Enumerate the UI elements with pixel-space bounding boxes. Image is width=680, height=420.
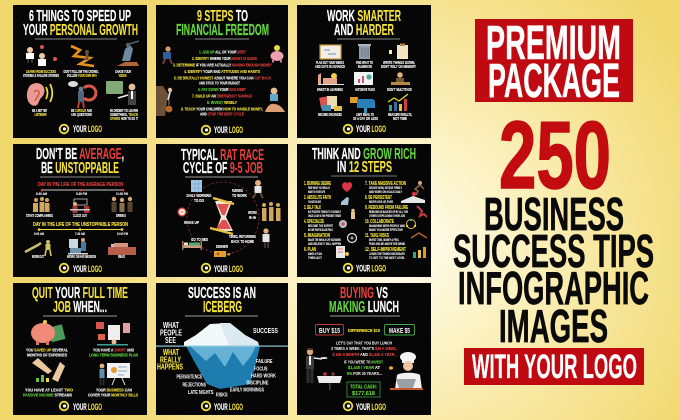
icon: workers crowd	[262, 202, 280, 221]
icon: desk with books	[108, 243, 136, 255]
timeline: unstoppable person: DAY IN THE LIFE OF THE UNSTOPPABLE PERSON	[33, 222, 128, 228]
caption: plan out your weeks	[315, 60, 345, 69]
text: explanation	[331, 340, 397, 376]
caption row: average day: STAYS COMPLAINING	[26, 213, 53, 218]
list: nine steps: 9. TEACH YOUR CHILDREN HOW TO HANDLE MONEY,	[181, 106, 263, 112]
heading: work smarter	[327, 8, 401, 40]
logo: YOUR LOGO	[214, 264, 243, 275]
caption: passive income: YOU HAVE AT LEAST TWO	[25, 388, 74, 392]
list: steps 7 to 12: TO GET TO THE NEXT LEVEL	[369, 256, 405, 260]
logo: YOUR LOGO	[356, 124, 386, 135]
heading: rat race: TYPICAL RAT RACE	[181, 147, 264, 164]
icon: automate tasks chart	[354, 72, 373, 85]
labels: cycle steps: RUNNING	[232, 188, 243, 193]
heading: 6 things: 6 THINGS TO SPEED UP	[29, 8, 131, 25]
caption: measure results	[388, 112, 412, 121]
caption: write things down	[381, 60, 416, 69]
caption row: unstoppable day: WORK ON HIS MISSION	[67, 254, 96, 259]
caption: learn from success	[23, 69, 59, 78]
icon: piggy bank with cash	[31, 320, 65, 345]
list: steps 7 to 12: INVEST TIME, MONEY & FEEL	[369, 238, 399, 242]
label: success: SUCCESS	[253, 326, 278, 335]
heading: iceberg: ICEBERG	[203, 299, 242, 316]
list: steps 1 to 6: 2. ABSOLUTE FAITH	[304, 195, 331, 201]
text: what really happens: WHAT	[163, 348, 179, 357]
list: steps 7 to 12: MAKE YOU MORE EFFECTIVE	[369, 228, 403, 232]
labels: under the surface: DISCIPLINE	[246, 380, 269, 386]
caption: better listener	[32, 108, 47, 117]
panel: buying vs making lunch	[297, 283, 431, 415]
caption: teach others: IN ORDER TO LEARN	[110, 108, 138, 113]
panel: 9 steps to financial freedom	[156, 5, 288, 138]
list: steps 7 to 12: MANAGING WITH PEOPLE AND	[369, 224, 406, 228]
caption: don't multitask: DON'T MULTITASK	[387, 87, 412, 92]
list: steps 1 to 6: BECOME THE EXPERT	[308, 224, 333, 228]
list: steps 1 to 6: AND BELIEVE IT WILL HAPPEN	[308, 242, 341, 246]
timeline: average person: 11:30 PM	[116, 192, 128, 196]
caption: monthly bills: COVER YOUR MONTHLY BILLS	[88, 392, 138, 398]
panel: don't be average	[13, 144, 147, 277]
list: steps 1 to 6: 6. PLAN	[304, 247, 316, 253]
icon: waiter and table	[306, 348, 342, 390]
logo: YOUR LOGO	[356, 264, 386, 274]
list: nine steps: 4. IDENTIFY YOUR BAD ATTITUDES AND HABITS	[184, 69, 260, 74]
caption: better listener: LISTENER	[34, 112, 46, 117]
list: steps 7 to 12: REBOUND IS BACKED UP BY ALL THE	[369, 210, 408, 214]
icon: office building	[191, 180, 202, 192]
caption: follow your own way: FOLLOW YOUR OWN WAY	[67, 73, 97, 78]
heading: think and grow rich	[312, 146, 416, 176]
icons: right column	[401, 181, 427, 258]
icon: tired man	[262, 228, 270, 248]
heading: rat race	[181, 147, 264, 178]
text: what people see: SEE	[165, 336, 176, 345]
list: steps 1 to 6: 1. BURNING DESIRE	[304, 181, 331, 187]
panel: rat race cycle	[156, 144, 288, 277]
caption: curious	[71, 108, 92, 117]
caption: find what to eliminate: FIND WHAT TO	[356, 60, 373, 65]
list: steps 1 to 6: SAY POSITIVE THINGS TO YOURSELF	[308, 210, 341, 214]
logo: YOUR LOGO	[214, 125, 243, 136]
comparison: buy vs make	[316, 324, 414, 335]
heading: think and grow rich: IN 12 STEPS	[337, 159, 392, 176]
list: steps 1 to 6: IN ONE PARTICULAR FIELD	[308, 228, 333, 232]
caption: chase your vision	[115, 69, 131, 78]
logo: YOUR LOGO	[356, 402, 386, 413]
text: explanation: $ 156 A MONTH AND $1,440 A YEAR.	[332, 352, 396, 357]
labels: under the surface: PERSISTENCE	[176, 374, 203, 380]
heading: buying vs making	[329, 285, 400, 316]
text: what really happens	[157, 348, 183, 372]
timeline: average person: DAY IN THE LIFE OF THE AVERAGE PERSON	[38, 182, 123, 188]
list: steps 1 to 6: THEN ACT	[308, 256, 322, 260]
list: steps 7 to 12	[365, 181, 408, 260]
icons: left column	[336, 182, 356, 258]
caption: business plan: YOU HAVE A SHORT AND	[93, 348, 134, 352]
icon: mailbox and envelope	[350, 97, 375, 113]
labels: under the surface: FAILURE	[256, 359, 273, 365]
heading: 9 steps	[176, 8, 269, 40]
caption: become organized: BECOME ORGANIZED	[318, 112, 342, 117]
caption: saved up: YOU SAVED UP SEVERAL	[26, 348, 68, 352]
labels: cycle steps: WAKE UP	[184, 220, 199, 225]
list: steps 7 to 12: NEVER GIVE UP, EVER	[369, 200, 393, 204]
heading: quit your job	[32, 285, 128, 316]
icon: business plan papers	[96, 322, 130, 346]
caption: saved up	[26, 348, 68, 358]
icon: bed	[182, 241, 202, 250]
timeline: unstoppable person	[33, 222, 128, 236]
caption: find what to eliminate: ELIMINATE	[358, 64, 372, 69]
text: what people see: PEOPLE	[160, 328, 182, 338]
icon: teacher with green board	[106, 81, 136, 105]
banner: premium package	[475, 17, 633, 108]
caption: passive income: PASSIVE INCOME STREAMS	[23, 392, 72, 398]
labels: cycle steps	[184, 188, 257, 249]
icon: hands exchanging coins	[32, 358, 65, 382]
list: steps 7 to 12: FEAR AND BE ABOVE THE GRIND	[369, 242, 405, 246]
caption: limit email	[353, 112, 378, 121]
heading: buying vs making: MAKING LUNCH	[329, 299, 399, 316]
heading: quit your job: QUIT YOUR FULL TIME	[32, 285, 128, 302]
list: steps 7 to 12: AND WORK ON GOALS DAILY	[369, 190, 403, 194]
list: nine steps: 7. BUILD UP AN EMERGENCY SAVINGS	[192, 94, 252, 98]
panel: 6 things to speed up your personal growth	[13, 5, 147, 138]
list: steps 7 to 12: 10. COLLABORATE	[365, 219, 394, 225]
callout: total cash: $177,618	[352, 391, 375, 397]
text: what people see	[160, 321, 182, 345]
icon: hourglass	[210, 198, 234, 234]
caption: follow your own way: DON'T FOLLOW THE CROWD,	[64, 69, 98, 74]
icon: success and failure people	[26, 45, 57, 66]
labels: cycle steps: DINNER	[216, 244, 228, 249]
panel: work smarter and harder	[297, 5, 431, 138]
icon: planning board	[320, 45, 341, 59]
caption: chase your vision: VISION	[118, 73, 126, 78]
iceberg illustration	[156, 323, 288, 389]
icon: dinner	[214, 251, 231, 257]
caption row: average day: DRINKS	[116, 213, 126, 218]
list: steps 7 to 12: LEARN THE THINGS NECESSARY	[369, 252, 406, 256]
caption: better listener: BE A BETTER	[32, 108, 47, 113]
list: nine steps: 8. INVEST WISELY	[207, 100, 237, 105]
comparison: buy vs make: BUY $15	[319, 326, 340, 335]
logo: YOUR LOGO	[73, 124, 102, 135]
heading: business success tips infographic images	[453, 188, 654, 352]
caption: find what to eliminate	[356, 60, 373, 69]
labels: cycle steps: BACK TO HOME	[231, 239, 254, 244]
list: steps 1 to 6	[304, 181, 341, 260]
timeline: unstoppable person: 10:00 PM	[117, 232, 128, 236]
icon: clocking out desk	[70, 199, 90, 213]
icon: man at desk	[391, 72, 410, 85]
list: steps 1 to 6: 5. IMAGINATION	[304, 233, 330, 239]
callout: total cash	[347, 382, 380, 397]
icon: man with presentation board	[100, 363, 130, 385]
caption: chase your vision: CHASE YOUR	[115, 69, 131, 74]
caption row: unstoppable day: READ	[118, 254, 125, 259]
labels: under the surface	[176, 359, 276, 398]
caption: passive income	[23, 388, 74, 398]
heading: quit your job: JOB WHEN...	[53, 299, 107, 316]
heading: business success tips infographic images: IMAGES	[499, 300, 608, 352]
list: steps 7 to 12: 7. TAKE MASSIVE ACTION	[365, 181, 406, 187]
caption: measure results: NOT TIME	[393, 116, 407, 121]
list: nine steps: AND STICK TO YOUR BUDGET	[199, 80, 240, 86]
caption: measure results: MEASURE RESULTS,	[388, 112, 412, 117]
labels: under the surface: HARD WORK	[251, 374, 276, 380]
caption: monthly bills	[88, 388, 138, 398]
icon: invest in learning	[318, 73, 344, 85]
text: explanation: $1,440 / YEAR AT	[348, 365, 380, 370]
labels: under the surface: EARLY MORNINGS	[230, 388, 264, 394]
caption row: unstoppable day: WORKOUT	[32, 254, 44, 259]
list: nine steps: 6. PAY DOWN YOUR BAD DEBT	[198, 87, 246, 92]
list: steps 7 to 12: OTHER STEPS DOING THEIR JOB	[369, 214, 405, 218]
caption: limit email: LIMIT EMAIL TO	[356, 112, 374, 117]
icon: trash can	[358, 44, 371, 59]
list: steps 7 to 12: 11. TAKE RISKS	[365, 233, 389, 239]
icon: climber with money bag	[156, 86, 172, 116]
list: nine steps: 1. ADD UP ALL OF YOUR DEBT	[199, 50, 246, 54]
icon: chef cooking	[389, 352, 423, 390]
heading: buying vs making: BUYING VS	[340, 285, 388, 302]
text: explanation: 8% FOR 30 YEARS...	[347, 371, 382, 376]
timeline: average person: 5:30 PM	[76, 192, 87, 196]
icon: complaining workers	[33, 197, 50, 212]
list: steps 7 to 12: 12. SELF-IMPROVEMENT	[365, 247, 407, 253]
list: steps 7 to 12: 8. BE PERSISTENT	[365, 195, 392, 201]
list: steps 1 to 6: FIND WHAT YOU REALLY	[308, 186, 330, 190]
number: 250: 250	[499, 102, 611, 209]
text: explanation: LET'S SAY THAT YOU BUY LUNCH	[336, 340, 393, 346]
caption: plan out your weeks: AND DAYS IN ADVANCE	[315, 64, 345, 69]
heading: think and grow rich: THINK AND GROW RICH	[312, 146, 416, 163]
list: nine steps: 2. IDENTIFY WHERE YOUR MONEY IS GOING	[192, 56, 257, 61]
caption: automate tasks: AUTOMATE TASKS	[355, 87, 375, 92]
icon: man working on mission	[68, 238, 88, 254]
caption: plan out your weeks: PLAN OUT YOUR WEEKS	[316, 60, 344, 65]
caption: curious: BE CURIOUS AND	[71, 108, 92, 113]
text: what really happens: REALLY	[160, 356, 181, 364]
list: steps 1 to 6: 3. SELF TALK	[304, 205, 321, 211]
heading: 6 things	[23, 8, 138, 40]
caption: monthly bills: YOUR BUSINESS CAN	[96, 388, 132, 392]
list: nine steps: 3. DETERMINE IF YOU ARE ACTUALLY MAKING ENOUGH MONEY	[173, 62, 272, 68]
caption: curious: ASK QUESTIONS	[71, 112, 92, 117]
list: steps 7 to 12: DECIDE NOW, DECIDE FIRMLY	[369, 186, 403, 190]
icon: man on mountain with telescope	[117, 41, 139, 66]
icon: alarm clock	[178, 208, 186, 216]
labels: under the surface: RISKS	[216, 392, 228, 398]
list: nine steps	[173, 50, 272, 116]
labels: cycle steps: GO TO BED	[191, 237, 208, 242]
heading: don't be average: BE UNSTOPPABLE	[41, 160, 119, 177]
caption: teach others: OTHERS HOW TO DO IT	[110, 116, 138, 121]
caption row: average day	[26, 213, 126, 218]
caption: follow your own way	[64, 69, 98, 78]
heading: don't be average: DON'T BE AVERAGE,	[36, 146, 124, 163]
caption: write things down: DON'T RELY ON MEMORY	[381, 64, 416, 69]
labels: under the surface: REJECTIONS	[182, 382, 206, 388]
list: steps 7 to 12: 9. REBOUND FROM FAILURE	[365, 205, 408, 211]
icon: runner	[253, 180, 263, 198]
caption: teach others: SOMETHING, TEACH	[110, 112, 138, 117]
comparison: buy vs make: DIFFERENCE $10	[348, 328, 380, 334]
icon: man with documents	[163, 46, 172, 64]
caption row: average day: CLOCK OUT	[73, 213, 87, 218]
labels: cycle steps: 9-5	[249, 215, 257, 220]
caption: learn from success: STORIES & FAILURE STORIES	[23, 73, 59, 78]
list: nine steps: AND STOP THE DEBT CYCLE	[200, 112, 244, 116]
list: steps 1 to 6: MAKE A PLAN	[308, 252, 322, 256]
timeline: average person	[36, 182, 128, 196]
panel: think and grow rich	[297, 144, 431, 277]
heading: don't be average	[36, 146, 124, 178]
list: steps 1 to 6: YOU MUST BELIEVE	[308, 200, 321, 204]
text: explanation: 3 TIMES A WEEK. THAT'S $39 A WEEK,	[331, 346, 397, 351]
caption: learn from success: LEARN FROM SUCCESS	[26, 69, 56, 74]
heading: 6 things: YOUR PERSONAL GROWTH	[23, 22, 138, 39]
caption: limit email: 3X A DAY OR LESS	[353, 116, 378, 121]
icon: man working out	[25, 240, 51, 256]
logo: YOUR LOGO	[214, 402, 243, 413]
heading: iceberg: SUCCESS IS AN	[188, 285, 256, 302]
text: explanation: IF YOU WERE TO INVEST	[344, 360, 383, 364]
list: steps 1 to 6: WANT IN YOUR LIFE	[308, 190, 325, 194]
caption: teach others	[110, 108, 138, 121]
timeline: average person: 8:30 AM	[36, 192, 47, 196]
caption: business plan	[89, 348, 138, 358]
panel: quit your full time job when	[13, 283, 147, 415]
logo: YOUR LOGO	[73, 402, 102, 413]
callout: total cash: TOTAL CASH:	[350, 384, 377, 390]
heading: rat race: CYCLE OF 9-5 JOB	[183, 160, 263, 177]
icon: growth chart	[388, 94, 408, 111]
text: what really happens: HAPPENS	[157, 362, 183, 372]
caption row: unstoppable day	[32, 254, 125, 259]
heading: work smarter: WORK SMARTER	[327, 8, 401, 25]
labels: under the surface: LATE NIGHTS	[188, 390, 214, 396]
list: steps 1 to 6: IMAGE THE WHOLE LIFE SCENARIO	[308, 238, 341, 242]
icon: organized papers	[319, 96, 342, 111]
icon: boy on a stack of coins	[265, 88, 285, 112]
comparison: buy vs make: MAKE $5	[389, 326, 410, 335]
list: steps 1 to 6: 4. SPECIALIZE	[304, 219, 324, 225]
timeline: unstoppable person: 5:00 AM	[34, 232, 44, 236]
labels: cycle steps: WORK	[248, 210, 257, 215]
cycle ring	[187, 182, 259, 254]
labels: cycle steps: TO WORK	[232, 193, 247, 198]
heading: work smarter: AND HARDER	[334, 22, 394, 39]
icon: ear and sound waves	[27, 83, 52, 106]
caption: saved up: MONTHS OF EXPENSES	[27, 352, 67, 358]
labels: under the surface: FOCUS	[254, 366, 268, 372]
list: nine steps: 5. BE BRUTALLY HONEST ABOUT WHERE YOU CAN CUT BACK	[174, 76, 271, 80]
caption: invest in learning: INVEST IN LEARNING	[317, 87, 343, 92]
panel: success is an iceberg	[156, 283, 288, 415]
icon: piggy bank	[270, 45, 284, 62]
heading: 9 steps: 9 STEPS TO	[197, 8, 248, 25]
caption: business plan: LONG TERM BUSINESS PLAN	[89, 352, 138, 358]
icon: curious man with magnet	[68, 81, 96, 108]
list: steps 1 to 6: ONCE A DAY IN THE PRESENT TENSE	[308, 214, 341, 218]
text: what people see: WHAT	[163, 321, 179, 330]
heading: iceberg	[185, 285, 258, 316]
logo: YOUR LOGO	[73, 264, 102, 275]
labels: cycle steps: DAILY MORNING	[186, 193, 212, 198]
timeline: unstoppable person: 7:30 AM	[75, 232, 85, 236]
labels: cycle steps: TO DO	[194, 198, 205, 203]
labels: cycle steps: TIRED, RETURNING	[229, 234, 256, 239]
caption: write things down: WRITE THINGS DOWN,	[383, 60, 415, 65]
icon: checklist and pencil	[389, 44, 408, 59]
heading: 9 steps: FINANCIAL FREEDOM	[176, 22, 269, 39]
icon: orange zigzag path	[71, 46, 94, 66]
icon: men drinking	[112, 197, 132, 212]
